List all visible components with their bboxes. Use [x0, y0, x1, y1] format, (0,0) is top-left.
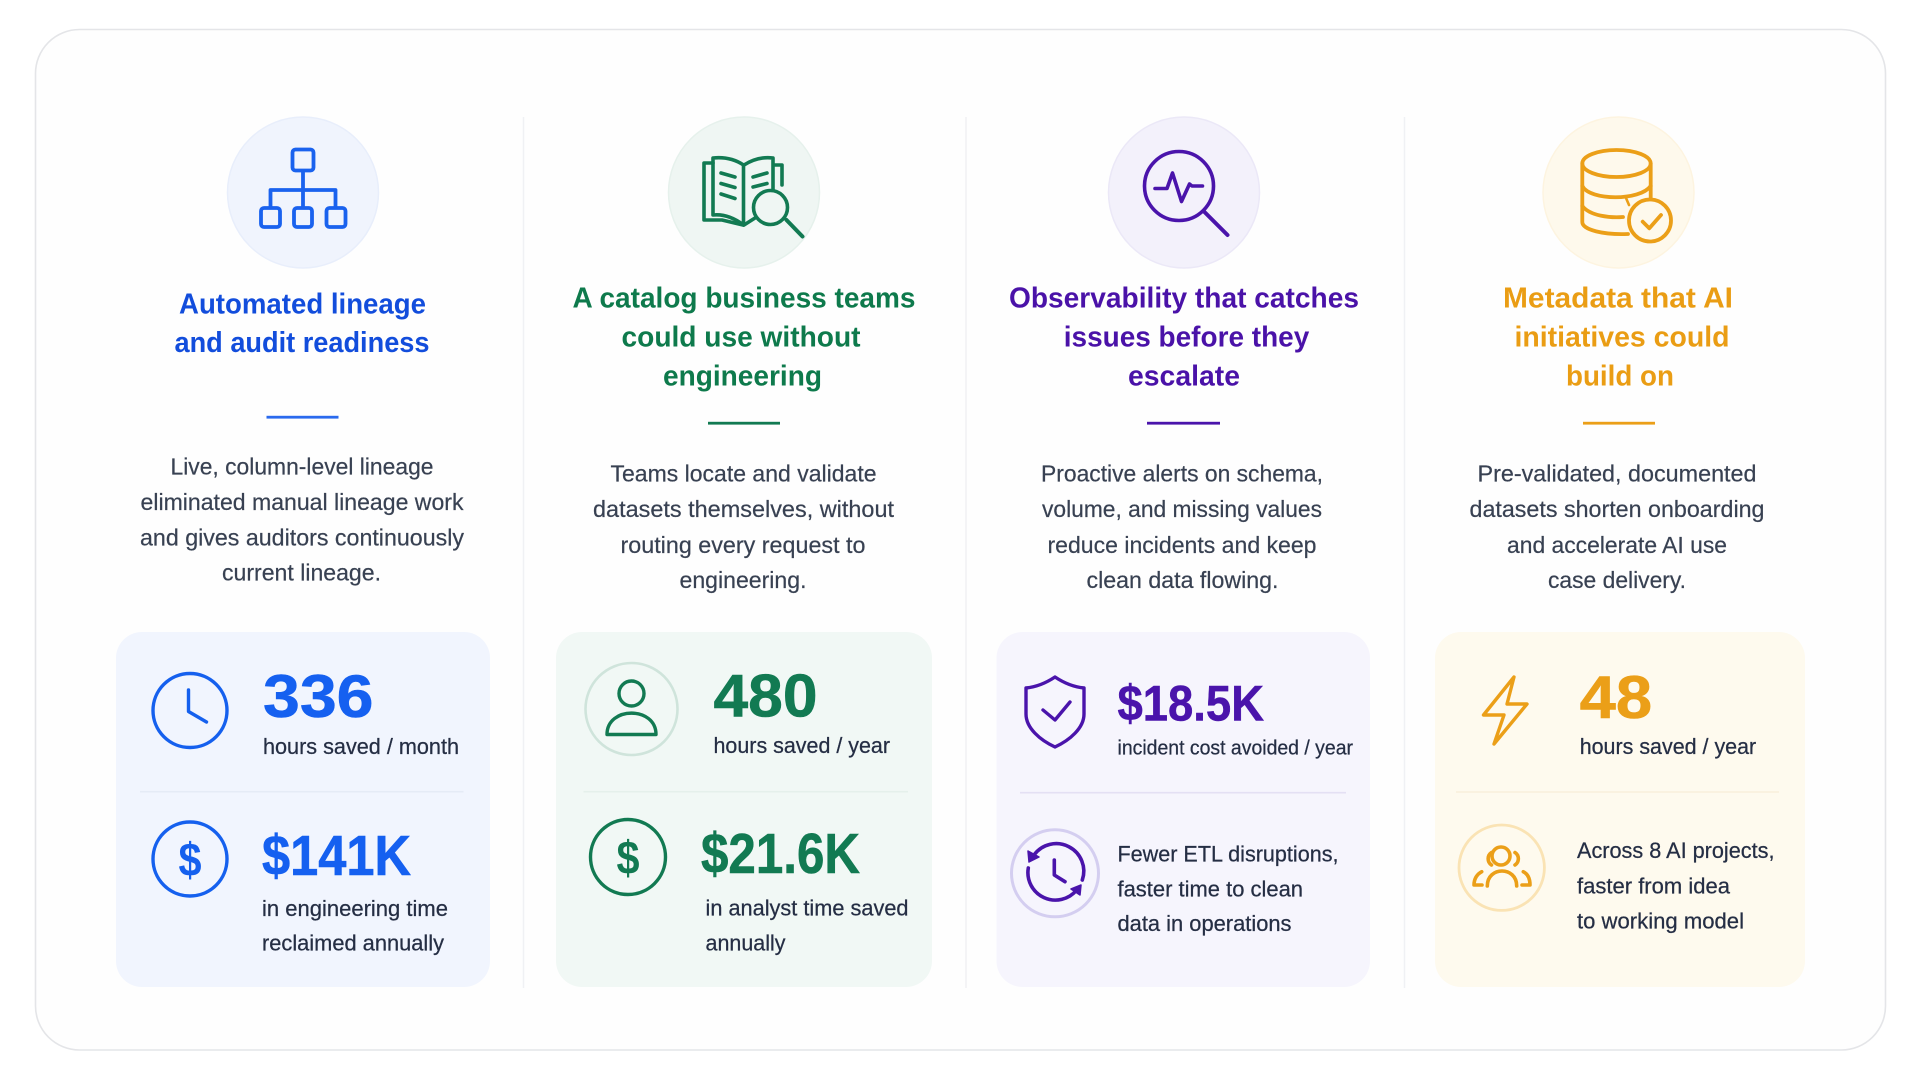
metric: 480: hours saved / year [714, 733, 890, 758]
icon: database check [1543, 117, 1694, 268]
heading: could use without [622, 322, 861, 354]
accent rule [1147, 422, 1220, 425]
column: AI metadata [1435, 117, 1805, 987]
icon: clock [153, 674, 227, 748]
body text: Teams locate and validate [610, 460, 876, 486]
body text: and gives auditors continuously [140, 524, 465, 550]
heading: build on [1566, 360, 1674, 392]
body text: reduce incidents and keep [1048, 532, 1316, 558]
icon: person [586, 663, 678, 755]
body text: current lineage. [222, 560, 381, 586]
icon: dollar: $ [616, 831, 640, 884]
metrics card [1435, 632, 1805, 987]
heading: engineering [663, 360, 822, 392]
metric: $21.6K: $21.6K [701, 822, 860, 886]
metric: 336 [263, 663, 459, 759]
heading [572, 282, 916, 392]
icon: shield check [1026, 677, 1084, 747]
column: observability [996, 117, 1370, 987]
metric: $21.6K: in analyst time saved [706, 896, 908, 921]
heading: escalate [1128, 360, 1240, 392]
icon: book with magnifier [668, 117, 820, 268]
body text: routing every request to [620, 532, 866, 558]
metric: $18.5K: $18.5K [1118, 676, 1264, 732]
metric text: AI projects: to working model [1577, 908, 1744, 933]
accent rule [1583, 422, 1655, 425]
metric: $18.5K: incident cost avoided / year [1118, 736, 1353, 759]
body text: and accelerate AI use [1507, 532, 1727, 558]
metric: $141K: in engineering time [262, 896, 448, 921]
body text: Proactive alerts on schema, [1041, 460, 1323, 486]
metric text: AI projects: faster from idea [1577, 873, 1730, 898]
body text [1041, 460, 1323, 593]
body text [1470, 460, 1764, 593]
heading [174, 288, 430, 359]
accent rule [266, 416, 338, 419]
heading: A catalog business teams [572, 282, 916, 314]
metric: 336: hours saved / month [263, 734, 459, 759]
metrics card [116, 632, 490, 987]
body text: case delivery. [1548, 567, 1686, 593]
body text [593, 460, 895, 593]
heading [1503, 282, 1733, 392]
metric: 480 [714, 663, 890, 758]
metric: 48 [1580, 664, 1757, 759]
metric: $141K [262, 824, 448, 956]
metric: 336: 336 [263, 663, 374, 730]
body text: engineering. [680, 567, 806, 593]
metric text: ETL disruptions: faster time to clean [1118, 877, 1303, 902]
metric: 48: 48 [1580, 664, 1652, 731]
metric: 48: hours saved / year [1580, 734, 1757, 759]
heading [1009, 282, 1359, 392]
icon: lineage hierarchy [228, 117, 378, 268]
heading: and audit readiness [174, 327, 430, 359]
icon: magnifier with pulse [1108, 117, 1260, 268]
metric: $21.6K: annually [706, 931, 786, 956]
metric text: AI projects: Across 8 AI projects, [1577, 838, 1774, 863]
body text: datasets shorten onboarding [1470, 496, 1764, 522]
icon: people [1459, 825, 1544, 910]
icon: cycle clock [1012, 830, 1098, 917]
column: business catalog [556, 117, 932, 987]
body text: Live, column-level lineage [170, 454, 434, 480]
metric: 480: 480 [714, 663, 818, 730]
metrics card [996, 632, 1370, 987]
metric: $141K: reclaimed annually [262, 931, 445, 956]
metric: $18.5K [1118, 676, 1353, 759]
metric text: ETL disruptions: data in operations [1118, 911, 1292, 936]
icon: dollar [153, 822, 227, 896]
body text: datasets themselves, without [593, 496, 895, 522]
body text: eliminated manual lineage work [140, 489, 464, 515]
metric: $21.6K [701, 822, 908, 956]
metric text: ETL disruptions [1118, 842, 1338, 936]
icon: dollar: $ [178, 833, 202, 886]
heading: Metadata that AI [1503, 282, 1733, 314]
body text [140, 454, 465, 586]
accent rule [708, 422, 780, 425]
body text: clean data flowing. [1086, 567, 1278, 593]
column: automated lineage [116, 117, 490, 987]
body text: Pre-validated, documented [1478, 460, 1756, 486]
heading: issues before they [1064, 322, 1309, 354]
heading: initiatives could [1514, 322, 1730, 354]
heading: Automated lineage [179, 288, 426, 320]
heading: Observability that catches [1009, 282, 1359, 314]
body text: volume, and missing values [1042, 496, 1322, 522]
icon: lightning bolt [1484, 677, 1527, 744]
metrics card [556, 632, 932, 987]
metric: $141K: $141K [262, 824, 411, 888]
icon: dollar [590, 820, 666, 894]
metric text: ETL disruptions: Fewer ETL disruptions, [1118, 842, 1338, 867]
metric text: AI projects [1577, 838, 1774, 933]
